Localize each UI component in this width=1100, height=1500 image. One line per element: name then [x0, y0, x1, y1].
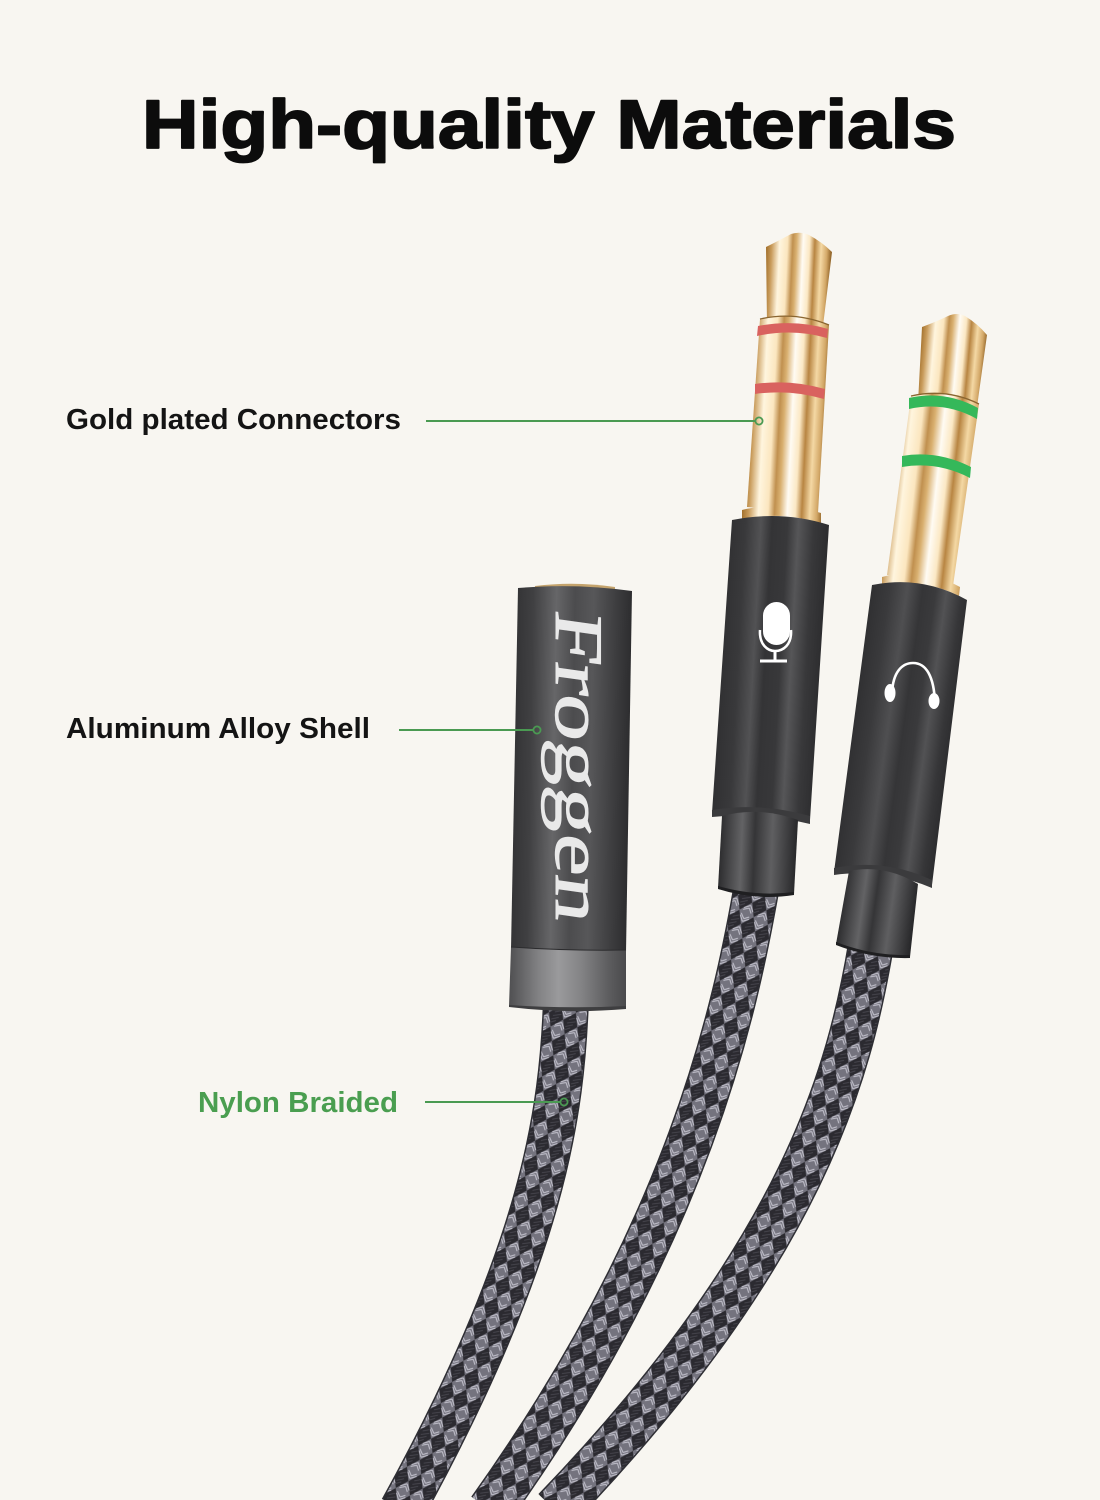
icon: microphone: [760, 602, 791, 661]
green rings: [909, 396, 978, 419]
label: aluminum alloy shell: Aluminum Alloy Shell: [66, 713, 370, 745]
title: High-quality Materials: [142, 86, 956, 163]
leader line: gold plated connectors: [426, 417, 763, 425]
gold tip: [918, 314, 987, 407]
brand text: Froggen: [541, 607, 617, 929]
leader line: nylon braided: [425, 1098, 568, 1106]
cable: left braided cable: [402, 1000, 566, 1500]
red rings: [757, 323, 828, 338]
leader line: aluminum alloy shell: [399, 726, 541, 734]
headset plug: [834, 314, 987, 958]
black housing: [712, 516, 829, 820]
female connector: aluminum alloy shell: [509, 584, 632, 1011]
label: gold plated connectors: Gold plated Connectors: [66, 404, 401, 436]
cable: middle braided cable: [490, 885, 757, 1500]
icon: headphones: [884, 663, 940, 709]
step sleeve: [718, 812, 798, 896]
cable: right braided cable: [555, 945, 871, 1500]
step sleeve: [836, 869, 918, 957]
gold tip: [766, 233, 832, 326]
microphone plug: [712, 233, 832, 897]
black housing: [834, 582, 967, 885]
label: nylon braided: Nylon Braided: [198, 1087, 398, 1119]
